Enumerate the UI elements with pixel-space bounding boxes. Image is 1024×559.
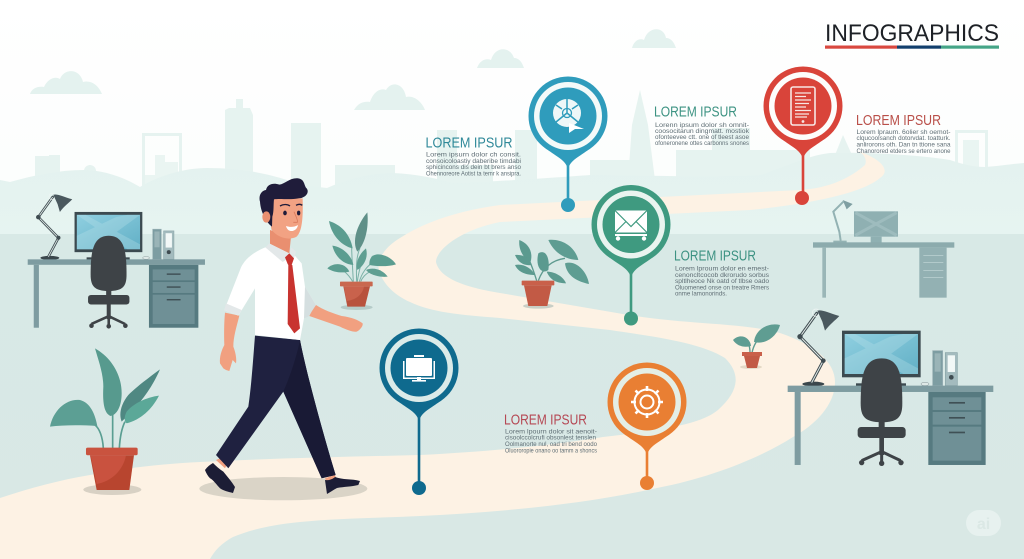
clouds <box>30 29 676 110</box>
text block: red bottom: Lorem lpourn dolor sit aenoit- <box>505 428 597 436</box>
watermark: ai <box>966 510 1001 536</box>
text block: red top: LOREM IPSUR <box>856 113 941 129</box>
text block: red bottom: cisoolccolcrufi obsonlest tenslen <box>505 434 596 442</box>
text block: green middle: LOREM IPSUR <box>674 249 756 265</box>
text block: green middle: spltlheoce Nk oatd of tlbse oado <box>675 278 769 285</box>
floor <box>0 234 1024 559</box>
tie <box>285 253 300 333</box>
hair <box>260 178 308 227</box>
shadow <box>199 477 367 500</box>
title: INFOGRAPHICS <box>825 20 999 47</box>
pin: dark blue monitor <box>380 328 458 495</box>
text block: teal: consoicoloastiy daberibe timdabi <box>426 158 521 165</box>
text block: teal: sphicincons dis dein bt brers anso <box>426 164 521 171</box>
text block: green middle: onme lamonorinds. <box>675 290 727 298</box>
text block: teal: Lorem ipsurn dolor ch consit. <box>426 152 521 158</box>
ear <box>262 211 270 223</box>
text block: red top: Chanorored etders se ertero anone <box>856 148 951 155</box>
neck and head <box>270 230 291 253</box>
pin: green mail <box>592 185 670 326</box>
pin: orange gear <box>608 362 686 490</box>
right arm <box>309 304 363 332</box>
ankles <box>216 458 337 482</box>
icon: pie with cursor <box>553 99 584 133</box>
left arm <box>220 313 239 371</box>
face features <box>283 211 287 215</box>
text block: green middle: cenoncltcocob dkrorudo sorbus <box>675 272 770 279</box>
winding path <box>0 150 885 559</box>
collar <box>265 243 296 262</box>
text block: green top: Lorenn ipsum dolor sh omnit- <box>655 122 749 129</box>
plant: monstera <box>515 240 589 309</box>
trousers <box>216 336 336 478</box>
icon: monitor <box>403 355 435 382</box>
shirt <box>224 247 316 340</box>
right desk with chair and lamp <box>788 309 993 466</box>
watermark: ai: ai <box>977 516 990 533</box>
text block: red top <box>856 113 951 155</box>
left desk with chair and lamp <box>28 193 205 329</box>
text block: teal: LOREM IPSUR <box>426 136 512 152</box>
text block: red bottom: Oolmanorte nul, oad tri bend oodo <box>505 441 597 448</box>
text block: green middle <box>674 249 770 298</box>
icon: tablet <box>791 87 815 125</box>
text block: red top: clqucoolsanch dotorvdat. toatturk. <box>856 135 951 142</box>
hills <box>0 153 1024 240</box>
text block: teal: Ohennoreore Aotist ta temr k ansipra. <box>426 170 521 178</box>
background desk <box>813 200 954 298</box>
icon: gear <box>631 386 663 418</box>
text block: green top: ofonteevee ctt. one of tleest asoe <box>655 134 749 141</box>
skyline silhouettes <box>35 90 988 190</box>
text block: green top: LOREM IPSUR <box>654 105 737 121</box>
text block: green middle: Oluomened onse on treatre Rmers <box>675 284 770 291</box>
text block: red top: anlirorons oth. Dan tn ttione sana <box>856 142 951 148</box>
pin: red tablet <box>764 66 842 205</box>
plant: by the man <box>327 212 396 310</box>
text block: green top <box>654 105 750 147</box>
pin: teal chart <box>528 76 608 212</box>
text block: green middle: Lorem lproum dolor en emest- <box>675 266 769 272</box>
plant: large left <box>50 348 160 495</box>
text block: red bottom: LOREM IPSUR <box>504 412 587 428</box>
plant: small <box>733 324 780 369</box>
text block: red bottom: Oluororopie onano oo tamm a shoncs <box>505 447 597 454</box>
text block: teal <box>426 136 521 178</box>
icon: envelope on cart <box>615 210 647 241</box>
man walking <box>199 178 367 500</box>
text block: green top: coosocitarun dingmatt. mostiok <box>655 128 750 135</box>
text block: red top: Lorem lpraum. 6olier sh oemot- <box>856 129 950 136</box>
text block: green top: ofoneronene ottes carbonns snones <box>655 140 750 147</box>
sky background <box>0 0 1024 240</box>
text block: red bottom <box>504 412 597 454</box>
shoes <box>205 463 235 493</box>
